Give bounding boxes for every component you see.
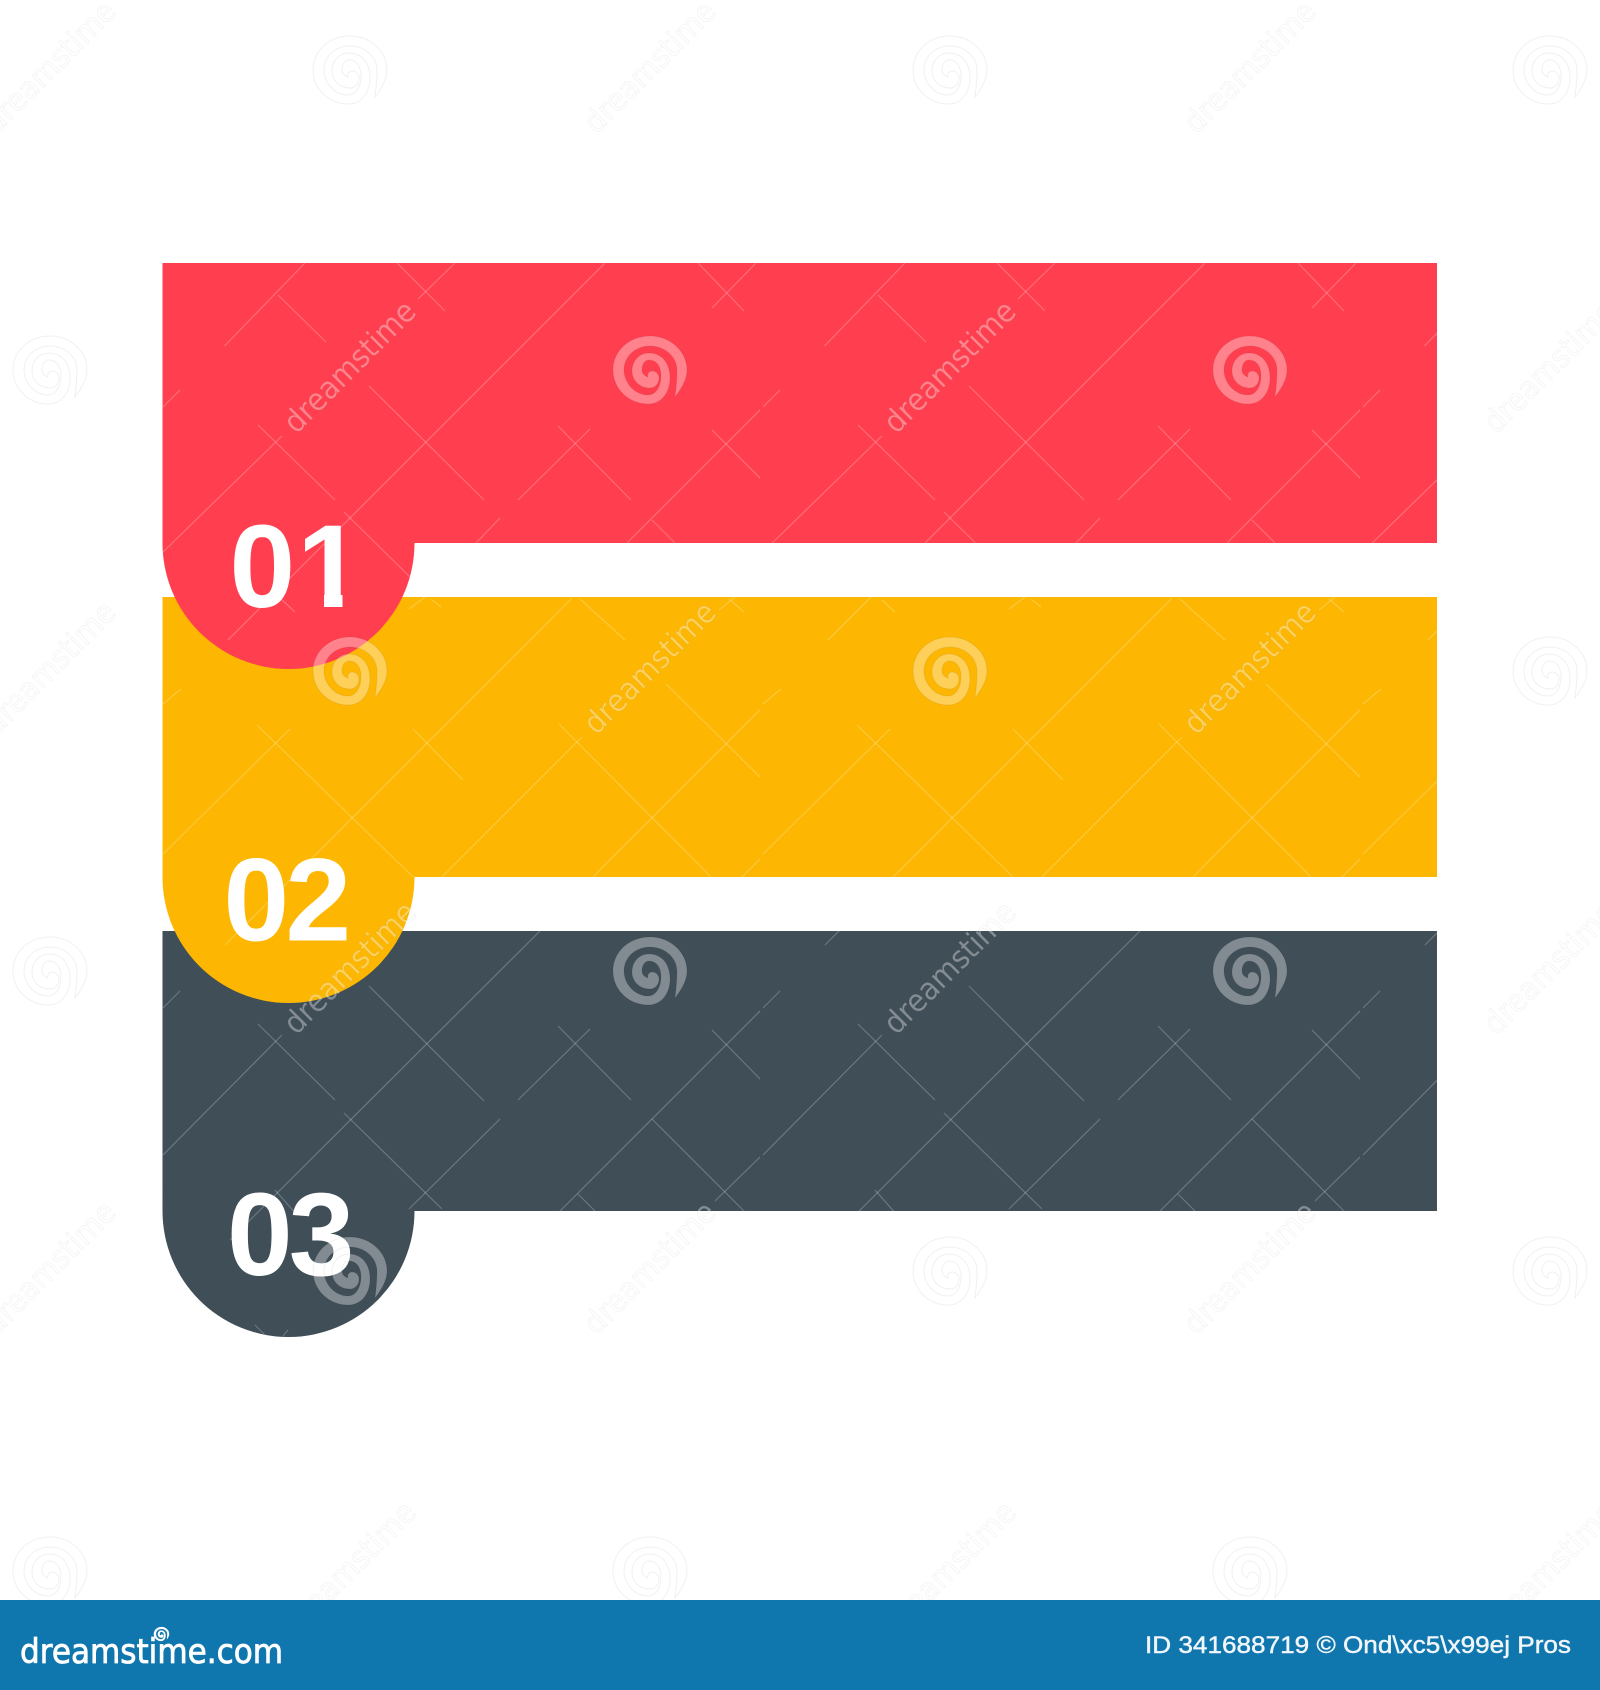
watermark diagonal wordmarks: dreamstime (1176, 594, 1324, 742)
watermark diagonal wordmarks: dreamstime (1176, 1194, 1324, 1342)
panel: banner 02 amber (162, 597, 1437, 1003)
number 03: 03 (227, 1169, 354, 1301)
footer logo: dreamstime.com: dreamstime.com (20, 1632, 283, 1672)
footer credit text: ID 341688719 © Ond\xc5\x99ej Pros (1145, 1632, 1571, 1659)
watermark diagonal wordmarks: dreamstime (276, 293, 424, 441)
panel: banner 01 red (162, 263, 1437, 669)
watermark diagonal wordmarks: dreamstime (276, 894, 424, 1042)
footer bar (0, 1600, 1600, 1690)
watermark diagonal wordmarks: dreamstime (876, 894, 1024, 1042)
watermark diagonal wordmarks: dreamstime (576, 594, 724, 742)
watermark diagonal wordmarks: dreamstime (876, 1494, 1024, 1642)
watermark diagonal wordmarks: dreamstime (576, 1194, 724, 1342)
number 01: 01 (230, 501, 363, 633)
number 02: 02 (224, 834, 351, 966)
watermark diagonal wordmarks: dreamstime (876, 293, 1024, 441)
panel: banner 03 dark slate (162, 931, 1437, 1337)
watermark crossing lines (162, 263, 1437, 1336)
watermark diagonal wordmarks: dreamstime (276, 1494, 424, 1642)
